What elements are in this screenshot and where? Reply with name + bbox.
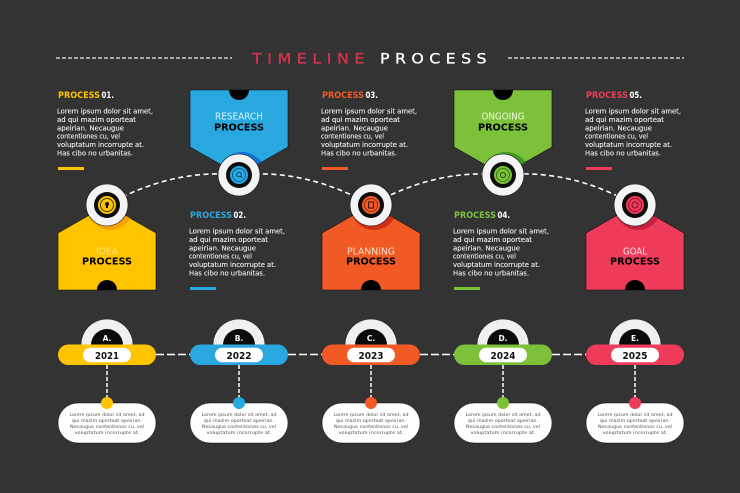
timeline item: 2025: Necaugue contentiones cu, vel <box>598 424 672 430</box>
text block: process 03 <box>321 91 417 170</box>
text block: process 03: Lorem ipsum dolor sit amet, <box>321 106 417 116</box>
timeline item: 2021: 2021 <box>95 351 119 362</box>
text block: process 03: ad qui mazim oporteat <box>321 115 400 124</box>
timeline item: 2022: qui mazim oporteat apeirian. <box>204 418 274 424</box>
text block: process 04: Has cibo no urbanitas. <box>453 268 529 277</box>
timeline item: 2024 <box>454 319 552 443</box>
text block: process 04: voluptatum incorrupte at. <box>453 260 540 269</box>
text block: process 02: voluptatum incorrupte at. <box>189 260 276 269</box>
timeline item: 2021: Lorem ipsum dolor sit amet, ad <box>70 412 145 418</box>
text block: process 04 <box>453 211 549 290</box>
text block: process 05: contentiones cu, vel <box>585 132 648 141</box>
timeline item: 2023: Necaugue contentiones cu, vel <box>334 424 408 430</box>
title: PROCESS <box>380 52 492 68</box>
timeline item: 2021: A. <box>103 334 112 343</box>
timeline item: 2024: voluptatum incorrupte at. <box>470 430 536 436</box>
text block: process 01: ad qui mazim oporteat <box>57 115 136 124</box>
icon: goal target <box>614 184 656 226</box>
timeline item: 2024: Lorem ipsum dolor sit amet, ad <box>466 412 541 418</box>
timeline item: 2023 <box>322 319 420 443</box>
timeline item: 2024: Necaugue contentiones cu, vel <box>466 424 540 430</box>
title: TIMELINE <box>251 52 370 68</box>
text block: process 01: Lorem ipsum dolor sit amet, <box>57 106 153 116</box>
timeline item: 2024: qui mazim oporteat apeirian. <box>468 418 538 424</box>
text block: process 05: ad qui mazim oporteat <box>585 115 664 124</box>
timeline item: 2023: qui mazim oporteat apeirian. <box>336 418 406 424</box>
timeline item: 2021: voluptatum incorrupte at. <box>74 430 140 436</box>
timeline item: 2021: qui mazim oporteat apeirian. <box>72 418 142 424</box>
text block: process 05: PROCESS <box>586 91 628 101</box>
text block: process 01 <box>57 91 153 170</box>
text block: process 03: Has cibo no urbanitas. <box>321 148 397 157</box>
timeline item: 2024: 2024 <box>490 351 516 362</box>
icon: planning document <box>350 184 392 226</box>
text block: process 02: contentiones cu, vel <box>189 252 252 261</box>
timeline connector <box>156 354 586 356</box>
text block: process 03: apeirian. Necaugue <box>321 123 388 132</box>
panel: ongoing process: PROCESS <box>478 122 528 133</box>
text block: process 05: 05. <box>630 91 642 101</box>
panel: ongoing process <box>454 90 552 164</box>
text block: process 05: Has cibo no urbanitas. <box>585 148 661 157</box>
timeline item: 2025: qui mazim oporteat apeirian. <box>600 418 670 424</box>
text block: process 01: voluptatum incorrupte at. <box>57 140 144 149</box>
timeline item: 2022: Lorem ipsum dolor sit amet, ad <box>202 412 277 418</box>
timeline item: 2025: 2025 <box>622 351 648 362</box>
text block: process 01: Has cibo no urbanitas. <box>57 148 133 157</box>
text block: process 04: ad qui mazim oporteat <box>453 235 532 244</box>
panel: planning process: PLANNING <box>347 246 395 258</box>
text block: process 04: contentiones cu, vel <box>453 252 516 261</box>
panel: goal process: GOAL <box>623 246 648 258</box>
text block: process 03: 03. <box>366 91 378 101</box>
text block: process 01: 01. <box>102 91 114 101</box>
panel: planning process <box>322 216 420 290</box>
panel: ongoing process: ONGOING <box>482 112 524 122</box>
timeline item: 2022: 2022 <box>226 351 252 362</box>
panel: research process <box>190 90 288 164</box>
panel: idea process: IDEA <box>96 246 118 258</box>
timeline item: 2023: voluptatum incorrupte at. <box>338 430 404 436</box>
text block: process 04: Lorem ipsum dolor sit amet, <box>453 226 549 236</box>
text block: process 03: PROCESS <box>322 91 364 101</box>
icon: idea lock <box>86 184 128 226</box>
text block: process 05: Lorem ipsum dolor sit amet, <box>585 106 681 116</box>
text block: process 01: apeirian. Necaugue <box>57 123 124 132</box>
timeline item: 2023: Lorem ipsum dolor sit amet, ad <box>334 412 409 418</box>
timeline item: 2021 <box>58 319 156 443</box>
text block: process 03: voluptatum incorrupte at. <box>321 140 408 149</box>
text block: process 01: contentiones cu, vel <box>57 132 120 141</box>
timeline item: 2025: E. <box>631 334 639 343</box>
panel: idea process: PROCESS <box>82 256 132 268</box>
title <box>56 52 684 68</box>
dashed arc connector <box>107 174 635 205</box>
timeline item: 2023: 2023 <box>358 351 384 362</box>
text block: process 05: voluptatum incorrupte at. <box>585 140 672 149</box>
text block: process 05: apeirian. Necaugue <box>585 123 652 132</box>
text block: process 02: PROCESS <box>190 211 232 221</box>
panel: research process: RESEARCH <box>215 112 263 122</box>
panel: goal process <box>586 216 684 290</box>
panel: goal process: PROCESS <box>610 256 660 268</box>
text block: process 03: contentiones cu, vel <box>321 132 384 141</box>
icon: ongoing target <box>482 154 524 196</box>
panel: idea process <box>58 216 156 290</box>
timeline item: 2022: voluptatum incorrupte at. <box>206 430 272 436</box>
text block: process 01: PROCESS <box>58 91 100 101</box>
panel: planning process: PROCESS <box>346 256 396 268</box>
timeline item: 2025: Lorem ipsum dolor sit amet, ad <box>598 412 673 418</box>
text block: process 04: 04. <box>498 211 510 221</box>
text block: process 05 <box>585 91 681 170</box>
timeline item: 2024: D. <box>498 334 508 343</box>
text block: process 04: PROCESS <box>454 211 496 221</box>
timeline item: 2025 <box>586 319 684 443</box>
timeline item: 2022 <box>190 319 288 443</box>
icon: research magnifier <box>218 154 260 196</box>
text block: process 02: apeirian. Necaugue <box>189 243 256 252</box>
text block: process 04: apeirian. Necaugue <box>453 243 520 252</box>
text block: process 02 <box>189 211 285 290</box>
text block: process 02: Has cibo no urbanitas. <box>189 268 265 277</box>
panel: research process: PROCESS <box>214 122 264 133</box>
timeline item: 2022: B. <box>235 334 243 343</box>
timeline item: 2025: voluptatum incorrupte at. <box>602 430 668 436</box>
timeline item: 2021: Necaugue contentiones cu, vel <box>70 424 144 430</box>
timeline item: 2022: Necaugue contentiones cu, vel <box>202 424 276 430</box>
timeline item: 2023: C. <box>367 334 375 343</box>
text block: process 02: Lorem ipsum dolor sit amet, <box>189 226 285 236</box>
text block: process 02: 02. <box>234 211 246 221</box>
text block: process 02: ad qui mazim oporteat <box>189 235 268 244</box>
